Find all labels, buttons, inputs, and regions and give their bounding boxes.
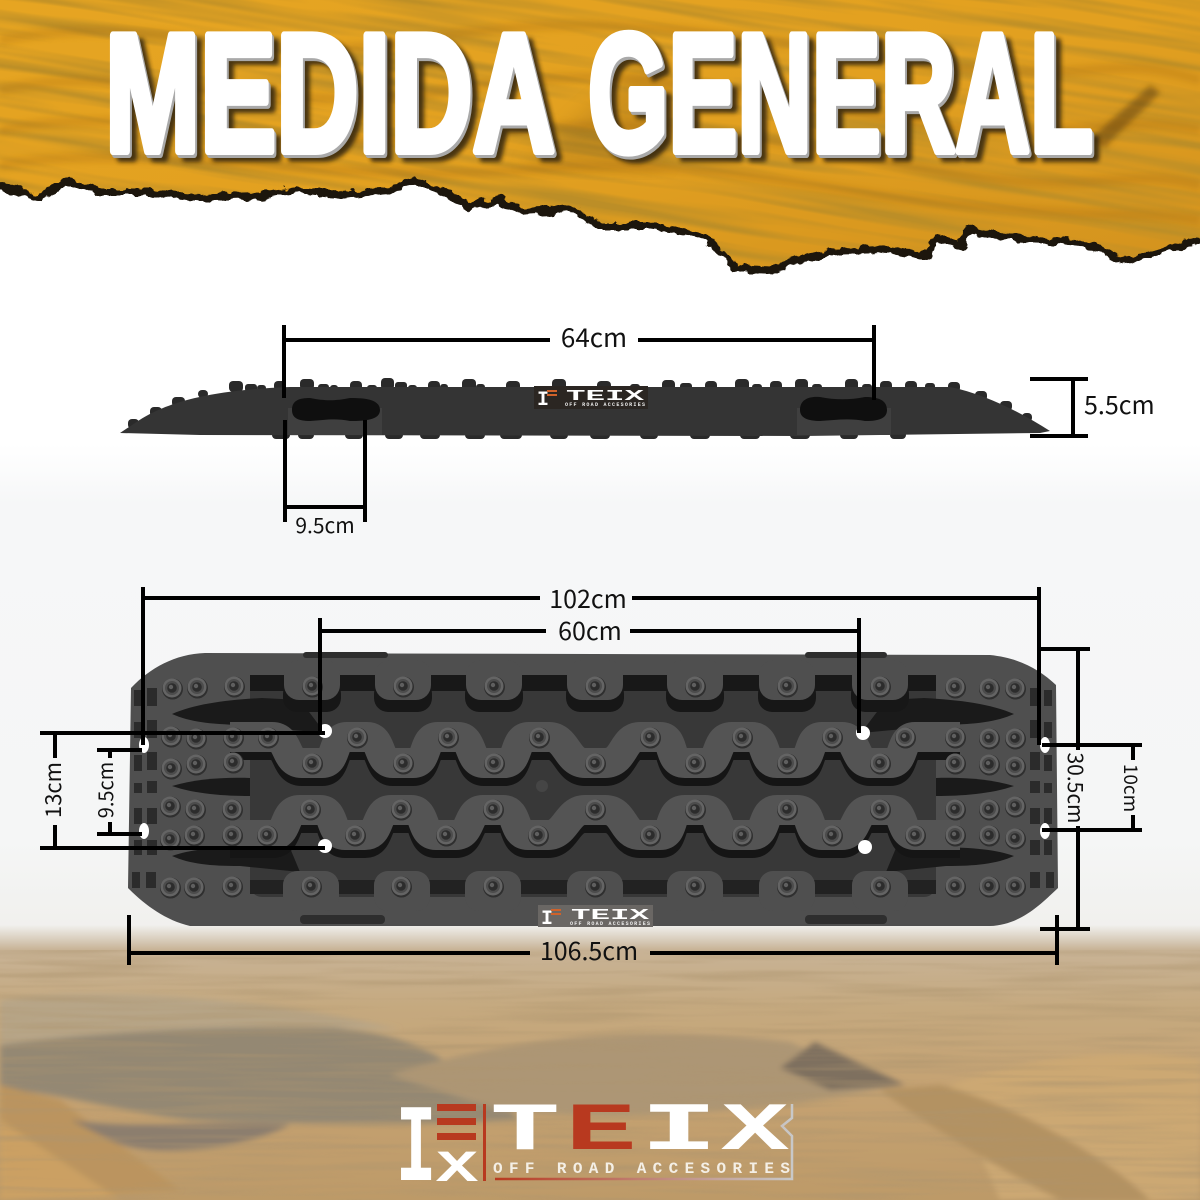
bolts [160,676,1026,898]
logo badge on board [538,905,653,931]
dimension: 64cm: 64cm [561,318,627,355]
dimension: 9.5cm height [90,750,142,834]
top cleats [283,660,909,712]
title shadow: MEDIDA [112,6,562,194]
logo badge on side [534,386,648,412]
wordmark TEIX: T [490,1093,560,1170]
torn paper edge [0,180,1200,420]
dark channels [250,675,936,897]
side view of recovery board [120,378,1050,439]
logo badge on side: OFF ROAD ACCESORIES [565,402,645,408]
title letters: MEDIDA [105,0,555,187]
dimension: 64cm [284,318,874,400]
handle slot left [288,398,382,435]
dimension: 102cm [143,580,1039,745]
dimension: 13cm [36,733,325,848]
dimension: 60cm: 60cm [558,612,622,648]
title bevel [107,2,1095,190]
dimension: 106.5cm: 106.5cm [540,932,638,968]
dimension: 106.5cm [129,915,1057,968]
handle slot right [797,397,891,435]
wordmark TEIX [490,1092,789,1170]
logo badge on side: TEIX [566,388,644,405]
wordmark TEIX: E [565,1093,637,1170]
wordmark TEIX: I [640,1092,718,1169]
dimension: 13cm: 13cm [36,762,68,818]
title [105,0,1100,194]
edge teeth left [132,688,157,888]
logo badge on board: OFF ROAD ACCESORIES [570,921,650,927]
dimension: 10cm: 10cm [1118,764,1145,812]
channel shadows [250,675,936,691]
title bevel: MEDIDA [107,2,557,190]
logo mark [396,1089,486,1200]
serpentine ridges [230,737,960,843]
recovery board top view [128,652,1058,931]
logo badge on side: I [537,389,549,412]
board body [128,653,1058,926]
tagline: OFF ROAD ACCESORIES [493,1160,790,1178]
title letters [105,0,1093,187]
logo frame [495,1104,792,1179]
mounting holes [139,724,1050,854]
bottom cleats [283,871,908,911]
slits right [861,698,1014,872]
dimension: 5.5cm: 5.5cm [1084,386,1155,422]
dimension: 5.5cm [1030,379,1155,436]
logo mark: X [436,1144,479,1195]
title shadow [112,6,1100,194]
handle notches [300,652,887,924]
logo badge on board: I [541,908,553,931]
slits left [172,698,325,872]
dimension: 10cm [1042,745,1145,830]
moulding mark [536,780,548,792]
dimension: 30.5cm: 30.5cm [1061,753,1091,823]
wordmark TEIX: X [721,1093,789,1170]
panel: orange sand banner [0,0,1200,274]
teeth on board profile [128,378,1032,439]
dimension: 9.5cm height: 9.5cm [90,762,119,818]
edge teeth right [1030,688,1054,888]
dimension: 102cm: 102cm [549,580,627,616]
dimension: 9.5cm width [285,420,365,540]
dimension: 60cm [320,612,859,733]
dimension: 9.5cm width: 9.5cm [295,510,355,540]
logo badge on board: TEIX [571,907,649,924]
brand logo [396,1089,792,1200]
dimension: 30.5cm [1040,649,1091,929]
